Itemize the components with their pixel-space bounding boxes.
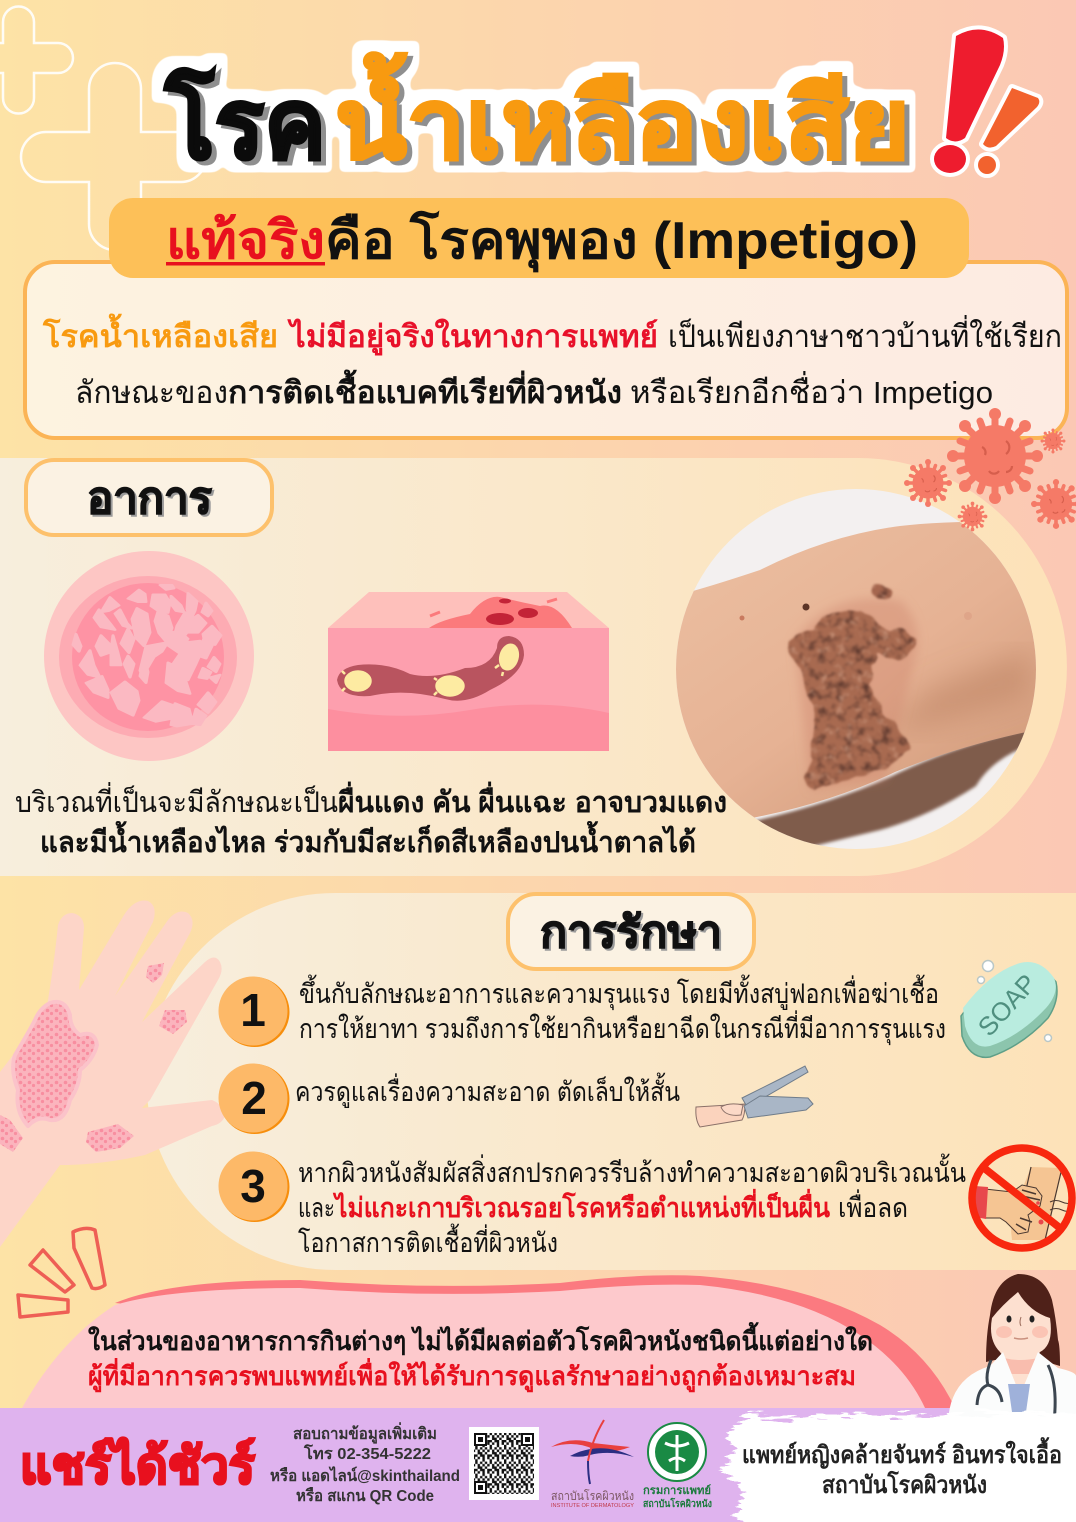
step 3 text: เพื่อลด (838, 1189, 908, 1223)
definition text: หรือเรียกอีกชื่อว่า Impetigo (630, 371, 993, 410)
callout: diet note (22, 1275, 955, 1408)
step 2 text: ควรดูแลเรื่องความสะอาด ตัดเล็บให้สั้น (295, 1072, 680, 1108)
contact text: โทร 02-354-5222 (303, 1443, 431, 1463)
step 1 text: การให้ยาทา รวมถึงการใช้ยากินหรือยาฉีดในกรณีที่มีอาการรุนแรง (299, 1010, 946, 1046)
icon: soap (961, 960, 1057, 1057)
logo: ministry of public health (643, 1423, 712, 1510)
step 3 text: และ (298, 1193, 335, 1223)
logo: institute of dermatology (551, 1420, 634, 1509)
contact text: หรือ สแกน QR Code (296, 1487, 434, 1505)
step 3 text (298, 1153, 966, 1258)
step 1 text (299, 974, 946, 1046)
definition text (42, 313, 1062, 410)
illustration: doctor (948, 1274, 1076, 1422)
icon: nail clipper (696, 1066, 813, 1127)
definition text: การติดเชื้อแบคทีเรียที่ผิวหนัง (228, 369, 622, 410)
logo: institute of dermatology: INSTITUTE OF DERMATOLOGY (551, 1503, 634, 1509)
contact text (270, 1422, 460, 1505)
white brush panel (722, 1411, 1076, 1522)
step 3 text: หากผิวหนังสัมผัสสิ่งสกปรกควรรีบล้างทำความสะอาดผิวบริเวณนั้น (298, 1153, 966, 1188)
logo: ministry of public health: กรมการแพทย์ (643, 1484, 711, 1497)
symptoms text: บริเวณที่เป็นจะมีลักษณะเป็น (15, 782, 338, 819)
definition text: โรคน้ำเหลืองเสีย (42, 313, 278, 354)
logo: ministry of public health: สถาบันโรคผิวหนัง (643, 1497, 712, 1510)
panel: symptoms background (0, 458, 1067, 876)
title: น้ำเหลืองเสีย (335, 52, 910, 179)
symptoms text (15, 781, 727, 859)
decorative plus outlines (0, 7, 206, 250)
subtitle banner (109, 198, 969, 278)
decorative burst strokes (18, 1228, 105, 1317)
share slogan: แชร์ได้ชัวร์ (20, 1437, 255, 1494)
icon: skin cross-section diagram (328, 592, 609, 751)
step 1 number (218, 976, 290, 1047)
step 2 number (218, 1064, 290, 1134)
definition text: ไม่มีอยู่จริงในทางการแพทย์ (287, 318, 658, 356)
icon: exclamation marks (934, 29, 1039, 174)
heading: treatment: การรักษา (540, 908, 722, 957)
photo: impetigo on arm (670, 480, 1045, 856)
contact text: หรือ แอดไลน์@skinthailand (270, 1466, 460, 1485)
step 2 number: 2 (241, 1072, 267, 1124)
icon: do not scratch (972, 1148, 1074, 1248)
callout: diet note: ในส่วนของอาหารการกินต่างๆ ไม่ได้มีผลต่อตัวโรคผิวหนังชนิดนี้แต่อย่างใด (88, 1321, 873, 1356)
step 1 number: 1 (240, 984, 266, 1036)
icon: round skin lesion (44, 551, 254, 761)
panel: definition box (25, 262, 1067, 438)
heading: symptoms: อาการ (87, 474, 212, 523)
illustration: hand with rash (0, 901, 225, 1247)
subtitle banner: คือ โรคพุพอง (Impetigo) (325, 209, 918, 273)
step 3 number (218, 1152, 290, 1222)
symptoms text: และมีน้ำเหลืองไหล ร่วมกับมีสะเก็ดสีเหลืองปนน้ำตาลได้ (40, 820, 696, 859)
step 3 text: ไม่แกะเกาบริเวณรอยโรคหรือตำแหน่งที่เป็นผื่น (332, 1188, 830, 1223)
heading: treatment (508, 894, 754, 969)
decorative viruses (904, 408, 1076, 531)
definition text: ลักษณะของ (75, 375, 228, 410)
icon: soap: SOAP (972, 968, 1042, 1042)
step 3 number: 3 (240, 1160, 266, 1212)
title: โรค (164, 68, 326, 179)
subtitle banner: แท้จริง (166, 212, 325, 270)
doctor credit (742, 1436, 1062, 1499)
step 3 text: โอกาสการติดเชื้อที่ผิวหนัง (298, 1223, 558, 1258)
doctor credit: สถาบันโรคผิวหนัง (822, 1470, 987, 1499)
callout: diet note: ผู้ที่มีอาการควรพบแพทย์เพื่อให้ได้รับการดูแลรักษาอย่างถูกต้องเหมาะสม (88, 1357, 856, 1393)
step 1 text: ขึ้นกับลักษณะอาการและความรุนแรง โดยมีทั้งสบู่ฟอกเพื่อฆ่าเชื้อ (299, 974, 939, 1011)
title (164, 52, 910, 179)
symptoms text: ผื่นแดง คัน ผื่นแฉะ อาจบวมแดง (338, 781, 727, 819)
panel: treatment background (146, 893, 1076, 1270)
heading: symptoms (26, 460, 272, 535)
QR code (469, 1427, 539, 1500)
footer band (0, 1408, 1076, 1522)
logo: institute of dermatology: สถาบันโรคผิวหนัง (551, 1489, 634, 1503)
contact text: สอบถามข้อมูลเพิ่มเติม (293, 1422, 437, 1445)
